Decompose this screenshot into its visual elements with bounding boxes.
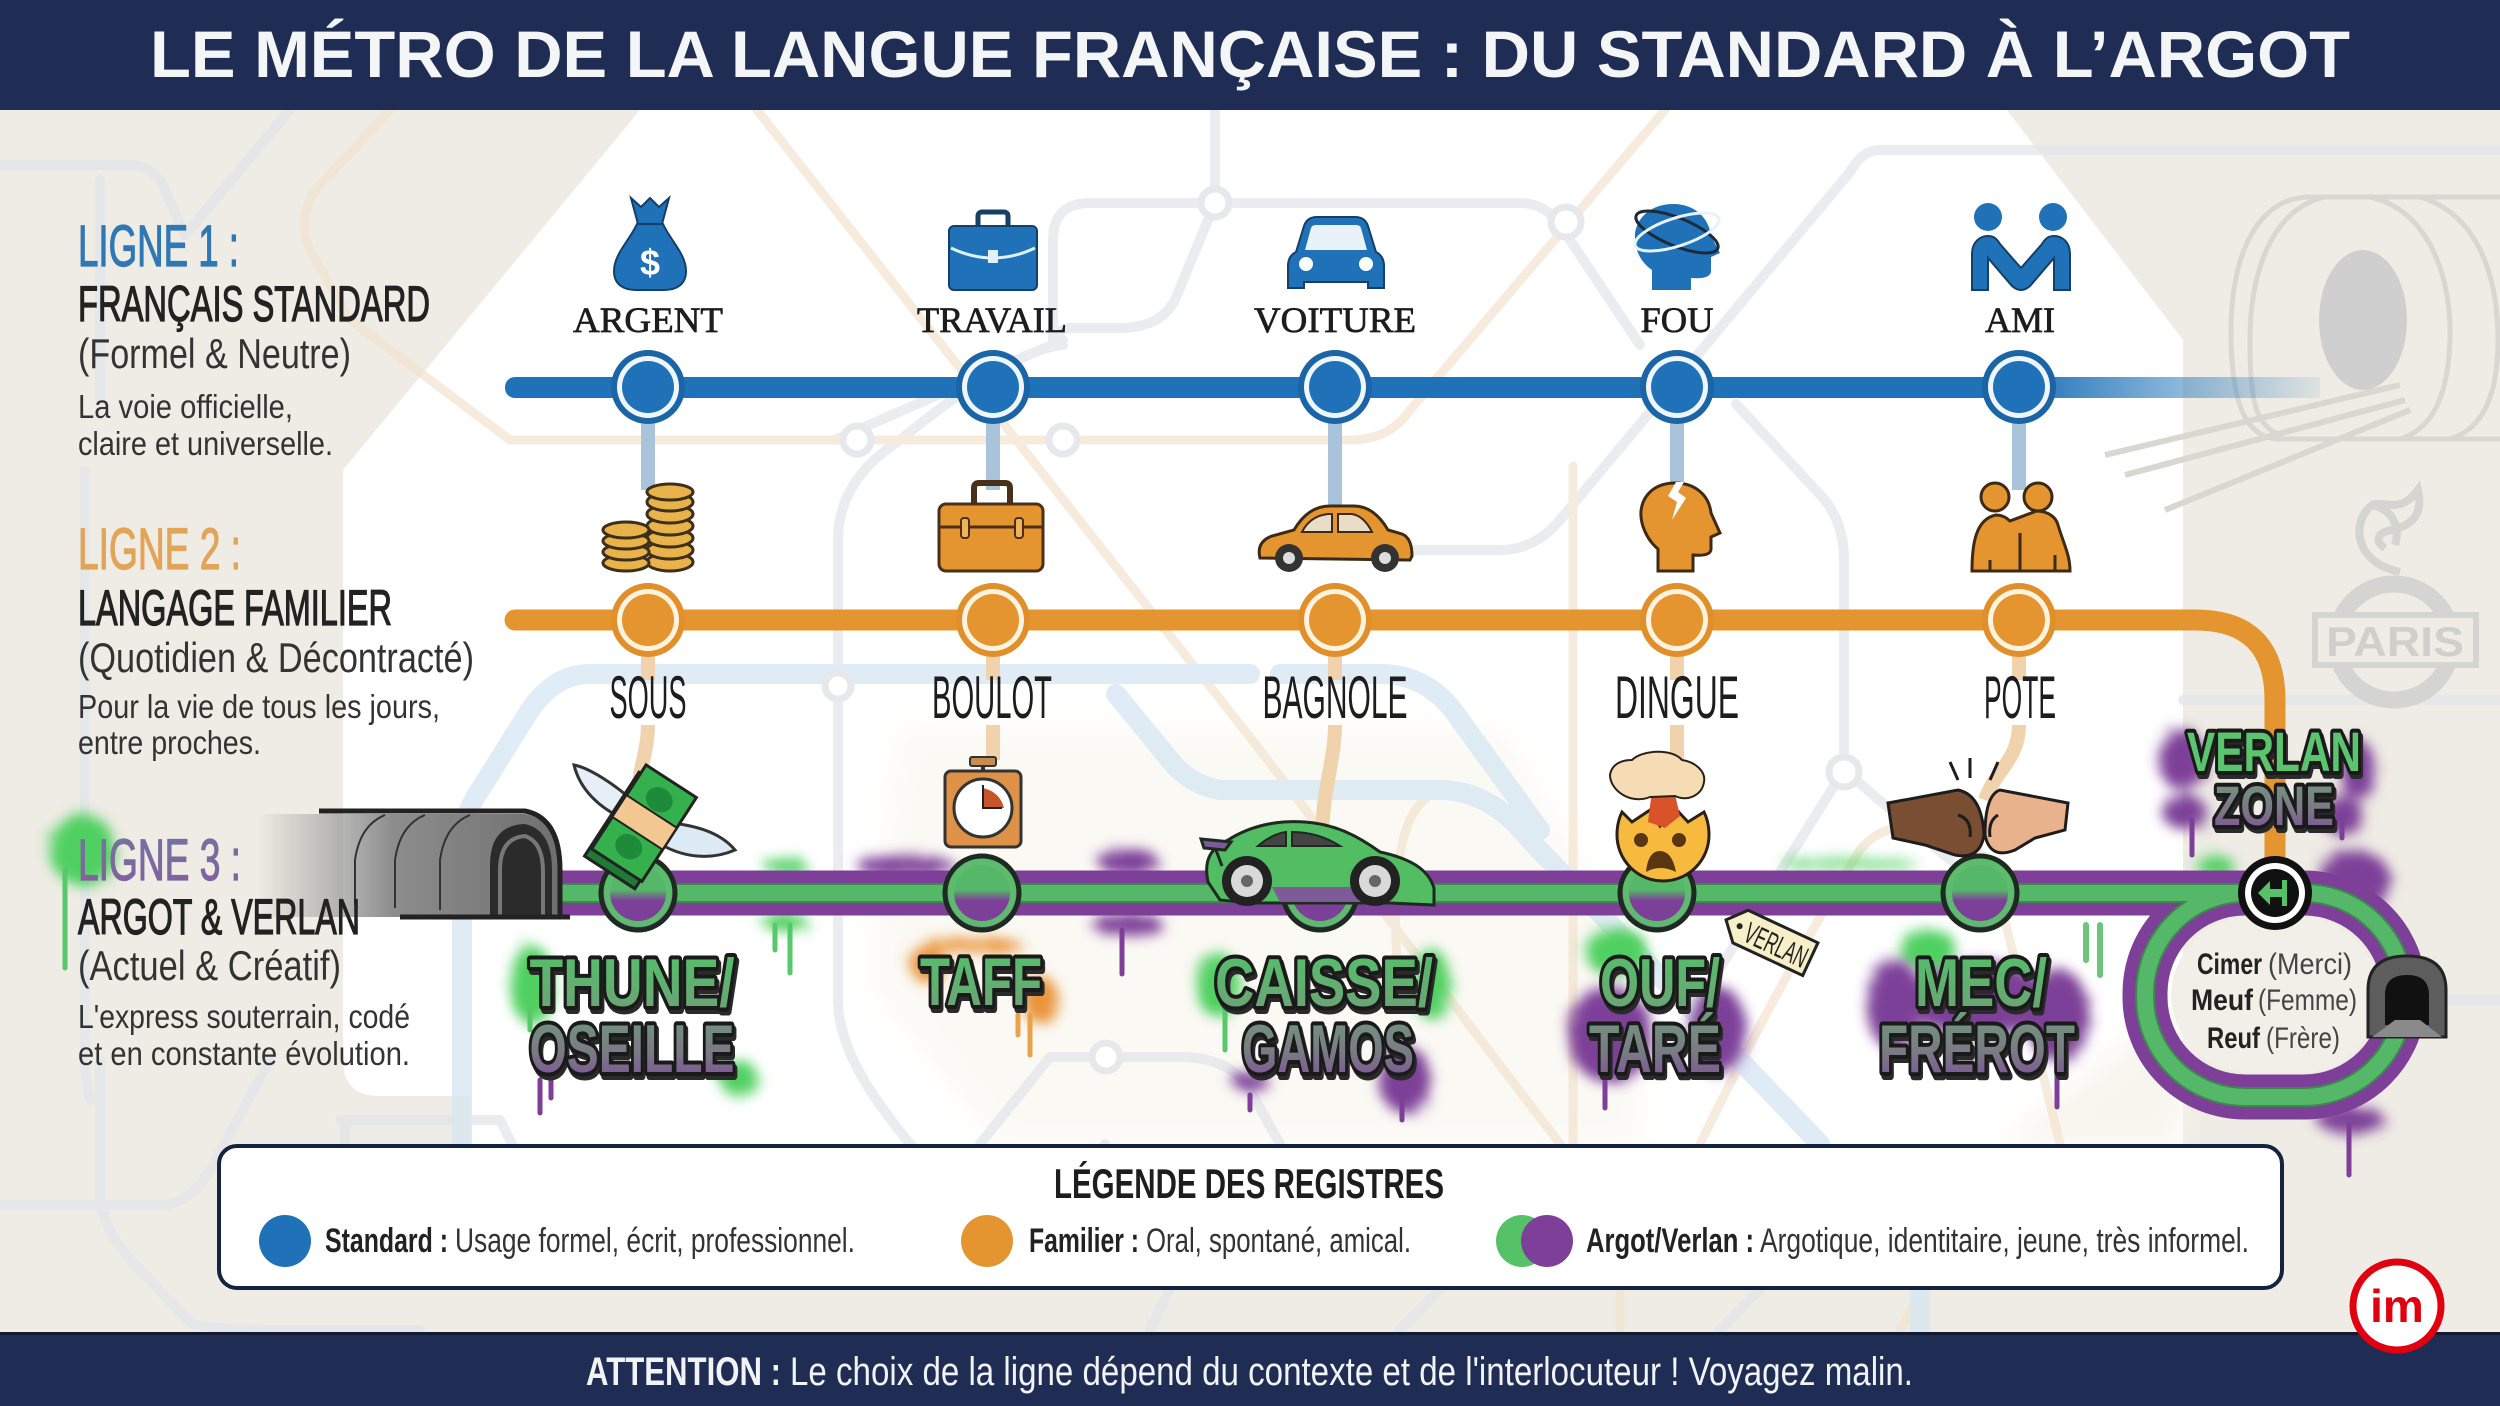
text: POTE bbox=[1984, 664, 2056, 731]
icon: orange car bbox=[1259, 506, 1412, 572]
ghost Paris logo bbox=[2315, 490, 2476, 700]
icon: exploding head emoji bbox=[1610, 752, 1709, 881]
logo im bbox=[2353, 1262, 2441, 1350]
loop vocabulary: Meuf bbox=[2191, 984, 2254, 1017]
icon: cracked head bbox=[1641, 482, 1720, 571]
graffiti labels: THUNE/ bbox=[530, 945, 735, 1021]
familiar labels: DINGUE bbox=[1615, 664, 1739, 731]
ligne 3 text block bbox=[78, 828, 410, 1072]
inside loop cutout bbox=[2171, 917, 2378, 1073]
familiar labels: SOUS bbox=[610, 664, 686, 731]
ligne 3 text block: L'express souterrain, codé bbox=[78, 998, 410, 1035]
ligne 2 text block: (Quotidien & Décontracté) bbox=[78, 634, 474, 681]
graffiti labels: OUF/ bbox=[1600, 945, 1720, 1021]
icon: briefcase blue bbox=[949, 212, 1037, 290]
standard labels: FOU bbox=[1640, 300, 1714, 340]
familiar labels: BAGNOLE bbox=[1262, 664, 1408, 731]
ghost tunnel right bbox=[2105, 197, 2500, 510]
icon: winged money bbox=[574, 764, 735, 890]
graffiti labels: OSEILLE bbox=[530, 1011, 734, 1087]
ligne 3 argot track and loop bbox=[498, 856, 2404, 1097]
icon: friends bbox=[1972, 483, 2070, 571]
icon: orange briefcase bbox=[939, 483, 1043, 571]
ligne 2 stations bbox=[611, 583, 2056, 657]
icon: fist bump bbox=[1888, 758, 2068, 856]
familiar labels: BOULOT bbox=[932, 664, 1052, 731]
verlan tag bbox=[1718, 904, 1818, 976]
graffiti labels: TAFF bbox=[920, 944, 1042, 1020]
graffiti labels: FRÉROT bbox=[1879, 1011, 2075, 1087]
ligne 3 text block: LIGNE 3 : bbox=[78, 828, 241, 893]
legend: argot: Argot/Verlan : bbox=[1586, 1222, 1754, 1260]
standard labels: AMI bbox=[1985, 300, 2055, 340]
ligne 2 text block: LIGNE 2 : bbox=[78, 517, 241, 582]
standard labels bbox=[573, 300, 2055, 340]
ligne 2 text block: entre proches. bbox=[78, 724, 261, 761]
loop vocabulary: (Frère) bbox=[2266, 1022, 2340, 1055]
title: LE MÉTRO DE LA LANGUE FRANÇAISE : DU STANDARD À L’ARGOT bbox=[150, 17, 2350, 91]
ligne 1 text block: (Formel & Neutre) bbox=[78, 330, 351, 377]
loop vocabulary: (Femme) bbox=[2258, 984, 2357, 1017]
ligne 2 text block: Pour la vie de tous les jours, bbox=[78, 688, 440, 725]
footer text: Le choix de la ligne dépend du contexte et de l'interlocuteur ! Voyagez malin. bbox=[790, 1350, 1913, 1394]
footer text: ATTENTION : bbox=[586, 1350, 781, 1394]
legend: argot: Argotique, identitaire, jeune, très informel. bbox=[1760, 1222, 2249, 1260]
verlan exit station bbox=[2238, 856, 2312, 930]
familiar labels bbox=[610, 664, 2056, 731]
graffiti labels: TARÉ bbox=[1589, 1011, 1721, 1087]
left tunnel bbox=[258, 811, 570, 917]
ligne 3 text block: et en constante évolution. bbox=[78, 1035, 410, 1072]
line headings bbox=[78, 214, 474, 1072]
legend: familier: Familier : bbox=[1029, 1222, 1139, 1260]
ligne 1 text block: FRANÇAIS STANDARD bbox=[78, 276, 430, 332]
icon: money bag: $ bbox=[640, 242, 660, 283]
paint drips bbox=[65, 820, 2349, 1175]
icon: green sports car bbox=[1201, 822, 1434, 906]
graffiti labels: CAISSE/ bbox=[1215, 945, 1433, 1021]
ligne 1 text block: claire et universelle. bbox=[78, 425, 333, 462]
legend: argot bbox=[1496, 1215, 2249, 1267]
ligne 1 text block: La voie officielle, bbox=[78, 388, 293, 425]
icon: head with orbits bbox=[1631, 203, 1723, 290]
legend: familier: Oral, spontané, amical. bbox=[1146, 1222, 1411, 1260]
ligne 1 text block bbox=[78, 214, 430, 462]
ligne 1 stations bbox=[611, 350, 2056, 424]
graffiti labels: GAMOS bbox=[1242, 1011, 1414, 1087]
loop vocabulary bbox=[2191, 948, 2357, 1055]
legend: standard: Usage formel, écrit, professionnel. bbox=[455, 1222, 855, 1260]
connectors between lines bbox=[638, 420, 2019, 840]
loop vocabulary: Reuf bbox=[2207, 1022, 2261, 1055]
verlan tag: VERLAN bbox=[1739, 917, 1813, 975]
standard labels: ARGENT bbox=[573, 300, 723, 340]
loop vocabulary: Cimer bbox=[2197, 948, 2262, 981]
footer band bbox=[0, 1332, 2500, 1406]
logo im: im bbox=[2370, 1280, 2424, 1332]
verlan zone label bbox=[2187, 720, 2361, 837]
icon: money bag bbox=[614, 198, 686, 290]
ghost Paris logo: PARIS bbox=[2326, 618, 2464, 665]
ligne 2 text block: LANGAGE FAMILIER bbox=[78, 580, 392, 636]
standard labels: VOITURE bbox=[1254, 300, 1416, 340]
ligne 3 stations bbox=[601, 856, 2017, 930]
header band bbox=[0, 0, 2500, 110]
loop vocabulary: (Merci) bbox=[2268, 948, 2352, 981]
icon: small tunnel bbox=[2368, 956, 2446, 1037]
legend: standard: Standard : bbox=[325, 1222, 448, 1260]
icon: coins bbox=[603, 484, 693, 571]
graffiti labels bbox=[530, 944, 2075, 1087]
icon: stopwatch bbox=[945, 757, 1021, 847]
graffiti labels: MEC/ bbox=[1915, 945, 2047, 1021]
ligne 1 text block: LIGNE 1 : bbox=[78, 214, 239, 279]
ligne 3 text block: (Actuel & Créatif) bbox=[78, 942, 341, 989]
ligne 2 text block bbox=[78, 517, 474, 761]
legend panel bbox=[219, 1146, 2282, 1288]
verlan zone label: ZONE bbox=[2214, 774, 2334, 837]
standard labels: TRAVAIL bbox=[917, 300, 1067, 340]
ligne 3 text block: ARGOT & VERLAN bbox=[78, 889, 360, 945]
icon: car front bbox=[1288, 217, 1384, 288]
legend: familier bbox=[961, 1215, 1411, 1267]
spray paint splashes bbox=[50, 730, 2391, 1175]
legend title: LÉGENDE DES REGISTRES bbox=[1054, 1160, 1444, 1207]
icon: handshake bbox=[1972, 203, 2070, 290]
verlan zone label: VERLAN bbox=[2187, 720, 2361, 783]
ligne 1 blue track bbox=[505, 350, 2320, 424]
legend: standard bbox=[259, 1215, 855, 1267]
ligne 2 orange track bbox=[515, 583, 2275, 860]
